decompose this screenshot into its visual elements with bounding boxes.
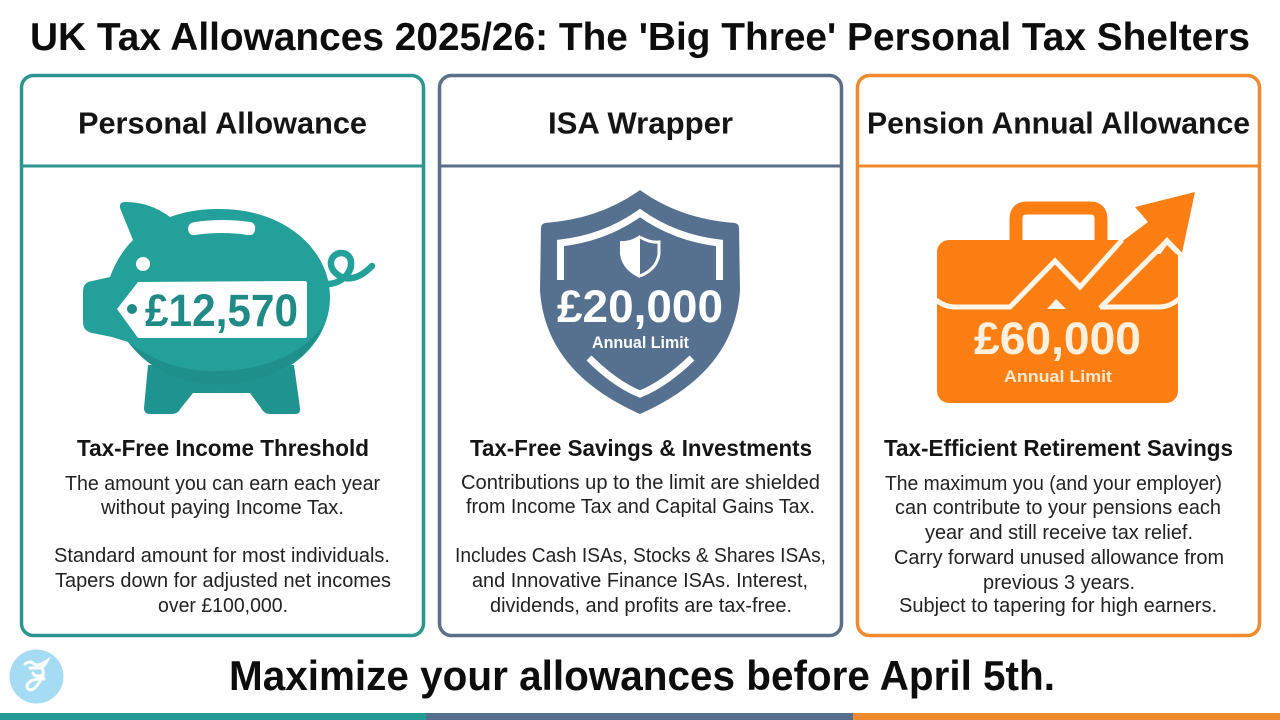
panel frame: ISA wrapper <box>440 76 842 636</box>
text block: tax-efficient retirement savings: previous 3 years. <box>983 571 1135 594</box>
text block: tax-free savings and investments: from Income Tax and Capital Gains Tax. <box>466 495 815 518</box>
icon: small half shield <box>620 235 659 278</box>
panel: ISA wrapper <box>440 76 842 636</box>
text block: tax-free savings and investments: Includes Cash ISAs, Stocks & Shares ISAs, <box>455 544 826 567</box>
text block: tax-efficient retirement savings: The maximum you (and your employer) <box>885 472 1222 495</box>
text block: tax-free savings and investments: dividends, and profits are tax-free. <box>490 594 792 617</box>
icon: piggy bank <box>83 202 372 414</box>
text block: tax-free income threshold: Standard amount for most individuals. <box>54 544 390 567</box>
text block: tax-efficient retirement savings <box>884 435 1233 617</box>
text block: tax-efficient retirement savings: Subject to tapering for high earners. <box>899 594 1217 617</box>
text block: tax-efficient retirement savings: can contribute to your pensions each <box>895 496 1221 519</box>
icon: shield <box>540 190 740 414</box>
text block: tax-free income threshold <box>54 435 391 617</box>
text block: tax-free income threshold: The amount you can earn each year <box>65 472 380 495</box>
icon: shield: Annual Limit <box>592 334 689 352</box>
panel: pension annual allowance <box>858 76 1260 636</box>
text block: tax-free savings and investments: Contributions up to the limit are shielded <box>461 471 820 494</box>
title: UK Tax Allowances 2025/26: The 'Big Three' Personal Tax Shelters <box>30 16 1250 59</box>
heading: ISA wrapper: ISA Wrapper <box>548 106 733 140</box>
text block: tax-efficient retirement savings: Carry forward unused allowance from <box>894 546 1224 569</box>
text block: tax-free income threshold: Tax-Free Income Threshold <box>77 435 369 461</box>
panel frame: pension annual allowance <box>858 76 1260 636</box>
text block: tax-free savings and investments: and Innovative Finance ISAs. Interest, <box>472 569 808 592</box>
icon: briefcase with rising arrow: Annual Limit <box>1004 367 1112 386</box>
text block: tax-free savings and investments <box>455 435 826 617</box>
bottom colour bar <box>0 713 1280 720</box>
icon: briefcase with rising arrow <box>936 192 1195 403</box>
text block: tax-free income threshold: Tapers down for adjusted net incomes <box>55 569 391 592</box>
panel frame: personal allowance <box>22 76 424 636</box>
text block: tax-free savings and investments: Tax-Free Savings & Investments <box>470 435 812 461</box>
text block: tax-free income threshold: over £100,000. <box>158 594 288 617</box>
text block: tax-efficient retirement savings: year and still receive tax relief. <box>925 521 1193 544</box>
text block: tax-efficient retirement savings: Tax-Efficient Retirement Savings <box>884 435 1233 461</box>
icon: logo badge <box>10 650 64 704</box>
heading: personal allowance: Personal Allowance <box>78 106 367 140</box>
icon: briefcase with rising arrow: £60,000 <box>974 313 1141 364</box>
text block: tax-free income threshold: without paying Income Tax. <box>100 496 344 519</box>
price tag: £12,570: £12,570 <box>145 285 298 336</box>
heading: pension annual allowance: Pension Annual Allowance <box>867 106 1250 140</box>
footer message: Maximize your allowances before April 5th. <box>229 652 1055 699</box>
icon: shield: £20,000 <box>557 281 723 332</box>
panel: personal allowance <box>22 76 424 636</box>
